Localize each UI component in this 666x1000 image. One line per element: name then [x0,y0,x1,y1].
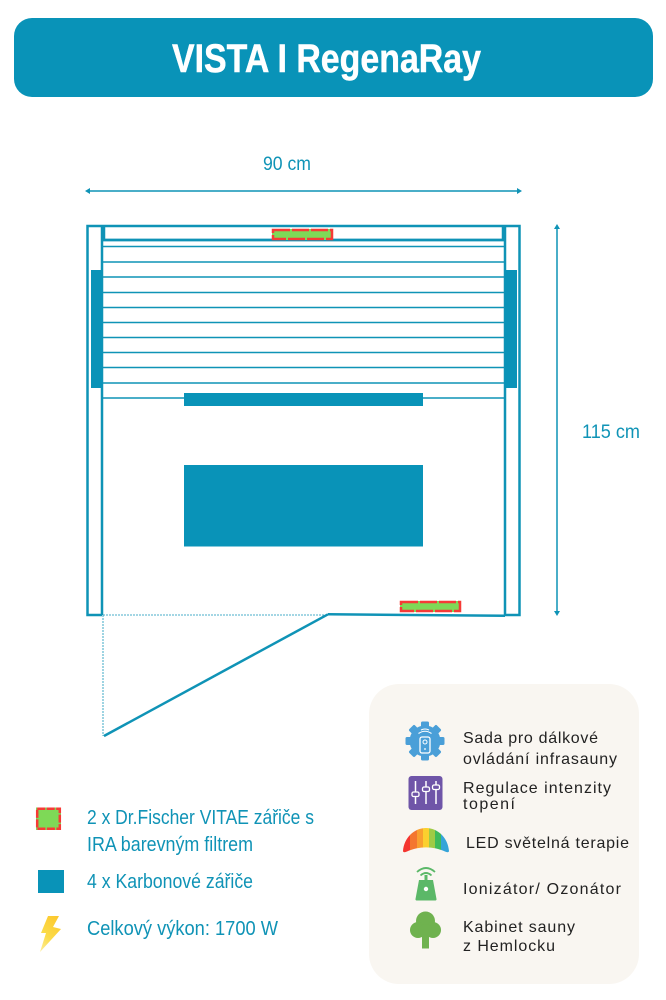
side carbon heaters [91,270,517,388]
width dimension [85,154,522,194]
text: remote control set: ovládání infrasauny [463,751,617,768]
width dimension: 90 cm [263,154,311,175]
text: heat intensity regulation: topení [463,796,516,813]
title: VISTA I RegenaRay [172,37,482,81]
depth dimension [554,224,640,616]
icon: LED rainbow [403,828,449,852]
legend text: Dr.Fischer heaters [87,807,314,856]
icon: Dr.Fischer heater [36,808,61,830]
legend [36,807,314,952]
depth dimension: 115 cm [582,422,640,443]
legend text: Dr.Fischer heaters: 2 x Dr.Fischer VITAE zářiče s [87,807,314,829]
icon: ionizer [415,868,437,900]
icon: carbon heater [38,870,64,893]
text: remote control set [463,730,617,768]
text: heat intensity regulation: Regulace intenzity [463,780,611,797]
text: heat intensity regulation [463,780,611,813]
header banner [14,18,653,97]
backrest carbon heater [184,393,423,406]
legend text: Dr.Fischer heaters: IRA barevným filtrem [87,834,253,856]
text: hemlock cabinet [463,919,575,955]
panel: features [369,684,639,984]
text: hemlock cabinet: z Hemlocku [463,938,555,955]
legend text: total power: Celkový výkon: 1700 W [87,918,278,940]
icon: lightning bolt [40,916,61,952]
text: hemlock cabinet: Kabinet sauny [463,919,575,936]
text: remote control set: Sada pro dálkové [463,730,598,747]
icon: remote control gear [406,722,444,760]
legend text: carbon heaters: 4 x Karbonové zářiče [87,871,253,893]
bottom Dr.Fischer heater [400,601,461,612]
text: ionizer and ozonator: Ionizátor/ Ozonátor [463,881,622,898]
sauna floor plan [88,226,520,736]
top Dr.Fischer heater [272,229,333,240]
text: LED light therapy: LED světelná terapie [466,835,629,852]
icon: tree [410,912,441,948]
icon: heat sliders [408,776,442,810]
bench carbon heater [184,465,423,546]
